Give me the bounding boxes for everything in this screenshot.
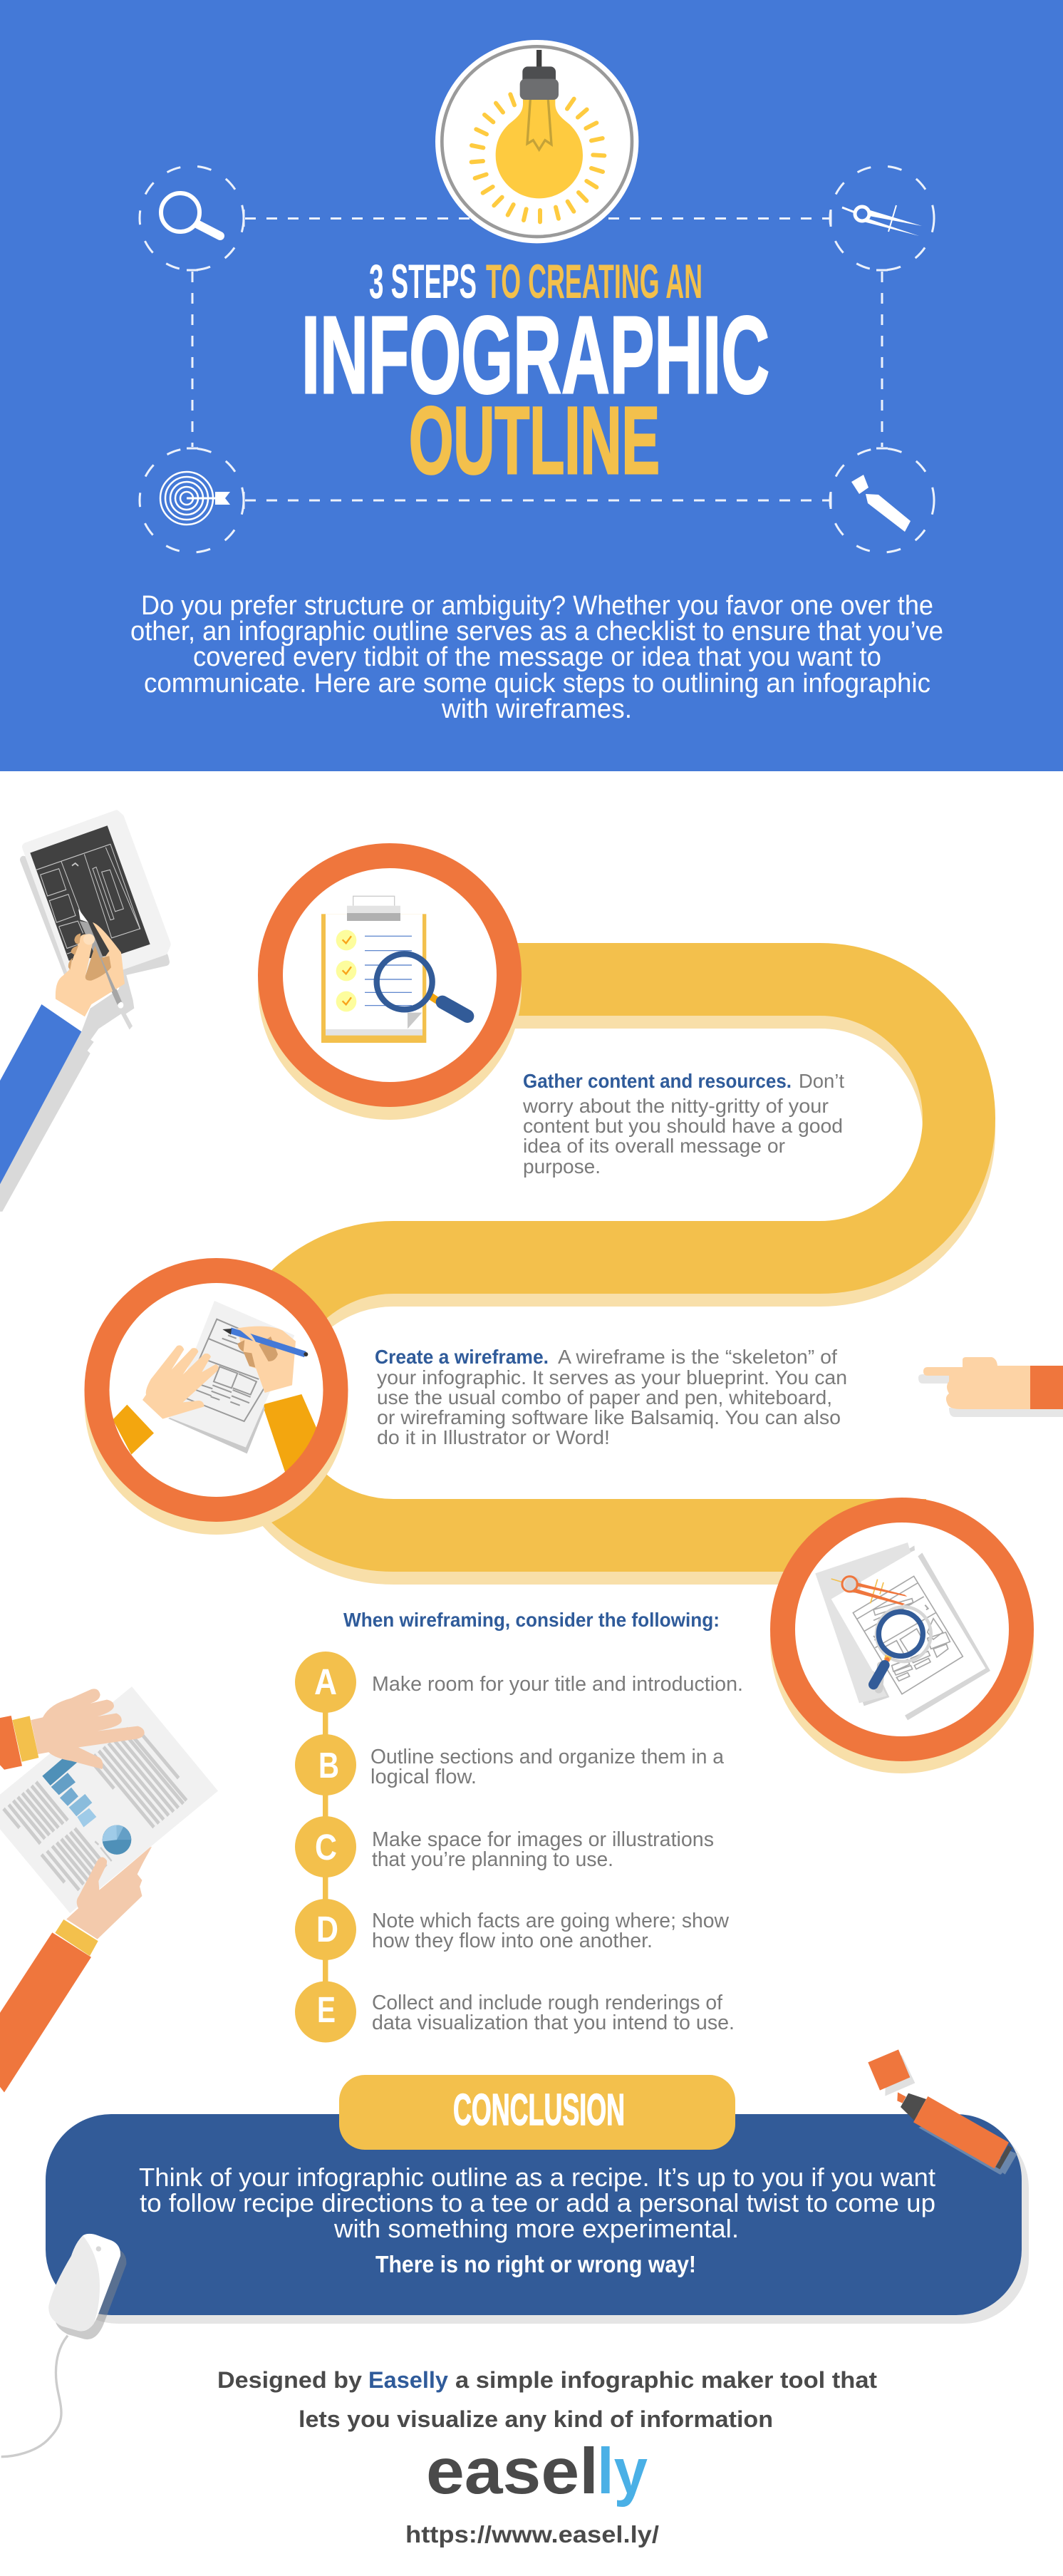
conclusion text: to follow recipe directions to a tee or add a personal twist to come up bbox=[140, 2188, 935, 2217]
icon: compass bbox=[842, 205, 922, 236]
dashed outline frame bbox=[140, 166, 934, 552]
illustration: mouse bbox=[1, 2234, 126, 2457]
logo: easelly: easel bbox=[426, 2436, 598, 2508]
title bbox=[301, 254, 769, 494]
item C bbox=[295, 1816, 714, 1877]
intro text: other, an infographic outline serves as a checklist to ensure that you’ve bbox=[130, 617, 943, 646]
intro text: communicate. Here are some quick steps to outlining an infographic bbox=[144, 669, 930, 699]
icon: target bbox=[160, 472, 230, 525]
title: OUTLINE bbox=[409, 388, 660, 494]
text: step 2: your infographic. It serves as your blueprint. You can bbox=[377, 1366, 847, 1389]
item D: D bbox=[316, 1909, 338, 1949]
conclusion label: CONCLUSION bbox=[453, 2086, 625, 2135]
conclusion label bbox=[339, 2075, 735, 2150]
icon: light bulb badge bbox=[435, 40, 638, 243]
item D: how they flow into one another. bbox=[372, 1930, 653, 1952]
illustration: hands holding report bbox=[0, 1686, 218, 2093]
text: step 1: idea of its overall message or bbox=[523, 1135, 785, 1157]
item A: A bbox=[314, 1661, 337, 1702]
footer credit: a simple infographic maker tool that bbox=[455, 2367, 877, 2393]
item C: that you’re planning to use. bbox=[372, 1848, 613, 1871]
illustration: marker bbox=[868, 2049, 1017, 2175]
list: lettered timeline bbox=[295, 1652, 743, 2043]
text: step 1: content but you should have a good bbox=[523, 1115, 843, 1137]
item D: Note which facts are going where; show bbox=[372, 1910, 730, 1932]
item E: E bbox=[317, 1989, 336, 2030]
intro text: covered every tidbit of the message or idea that you want to bbox=[193, 642, 881, 672]
panel: step 1 badge bbox=[258, 855, 522, 1120]
conclusion text: There is no right or wrong way! bbox=[375, 2251, 696, 2277]
panel: blue header bbox=[0, 0, 1063, 771]
text: step 2: use the usual combo of paper and pen, whiteboard, bbox=[377, 1386, 832, 1408]
conclusion text bbox=[139, 2163, 935, 2277]
item B: B bbox=[318, 1745, 339, 1786]
item D bbox=[295, 1899, 730, 1960]
item E bbox=[295, 1982, 735, 2043]
text: step 2: Create a wireframe. bbox=[375, 1346, 549, 1368]
item A bbox=[295, 1652, 743, 1713]
illustration: hand with tablet bbox=[0, 814, 167, 1212]
text: step 2: A wireframe is the “skeleton” of bbox=[558, 1346, 837, 1368]
intro text: Do you prefer structure or ambiguity? Whether you favor one over the bbox=[141, 591, 933, 621]
text: step 1 bbox=[522, 1070, 844, 1178]
conclusion text: with something more experimental. bbox=[333, 2214, 739, 2243]
footer credit: Easelly bbox=[368, 2367, 448, 2393]
item B bbox=[295, 1734, 725, 1796]
text: step 2: do it in Illustrator or Word! bbox=[377, 1426, 610, 1448]
logo: easelly: ly bbox=[597, 2436, 648, 2508]
title: TO CREATING AN bbox=[486, 254, 702, 309]
title: 3 STEPS bbox=[369, 254, 477, 309]
illustration: pointing hand bbox=[918, 1357, 1063, 1417]
icon: magnifier bbox=[161, 193, 220, 236]
footer credit bbox=[217, 2367, 877, 2432]
url: https://www.easel.ly/ bbox=[405, 2521, 659, 2547]
intro text: with wireframes. bbox=[441, 694, 632, 724]
item B: logical flow. bbox=[370, 1766, 477, 1788]
text: step 2 bbox=[375, 1346, 847, 1448]
text: step 1: worry about the nitty-gritty of your bbox=[522, 1095, 829, 1117]
panel: step 2 badge bbox=[84, 1270, 348, 1535]
item E: Collect and include rough renderings of bbox=[372, 1992, 723, 2014]
panel: conclusion bbox=[46, 2075, 1029, 2324]
text: step 1: Don’t bbox=[799, 1070, 844, 1092]
text: step 1: Gather content and resources. bbox=[523, 1070, 792, 1092]
winding road bbox=[254, 979, 959, 1548]
icon: clipboard with magnifier bbox=[321, 896, 467, 1043]
panel: step 3 badge bbox=[770, 1510, 1034, 1773]
conclusion text: Think of your infographic outline as a recipe. It’s up to you if you want bbox=[139, 2163, 935, 2192]
footer credit: lets you visualize any kind of information bbox=[299, 2406, 773, 2432]
illustration: hands drawing a wireframe bbox=[113, 1301, 321, 1475]
illustration: wireframe with compass and magnifier bbox=[815, 1542, 990, 1720]
item C: C bbox=[315, 1827, 337, 1867]
item E: data visualization that you intend to use. bbox=[372, 2011, 735, 2034]
item B: Outline sections and organize them in a bbox=[370, 1746, 725, 1768]
text: step 1: purpose. bbox=[523, 1155, 601, 1178]
title: INFOGRAPHIC bbox=[301, 294, 769, 416]
item C: Make space for images or illustrations bbox=[372, 1828, 714, 1851]
heading: wireframing considerations: When wireframing, consider the following: bbox=[343, 1609, 720, 1631]
icon: marker bbox=[851, 475, 911, 532]
item A: Make room for your title and introduction. bbox=[372, 1673, 743, 1696]
text: step 2: or wireframing software like Balsamiq. You can also bbox=[377, 1406, 841, 1428]
footer credit: Designed by bbox=[217, 2367, 362, 2393]
intro text bbox=[130, 591, 943, 724]
